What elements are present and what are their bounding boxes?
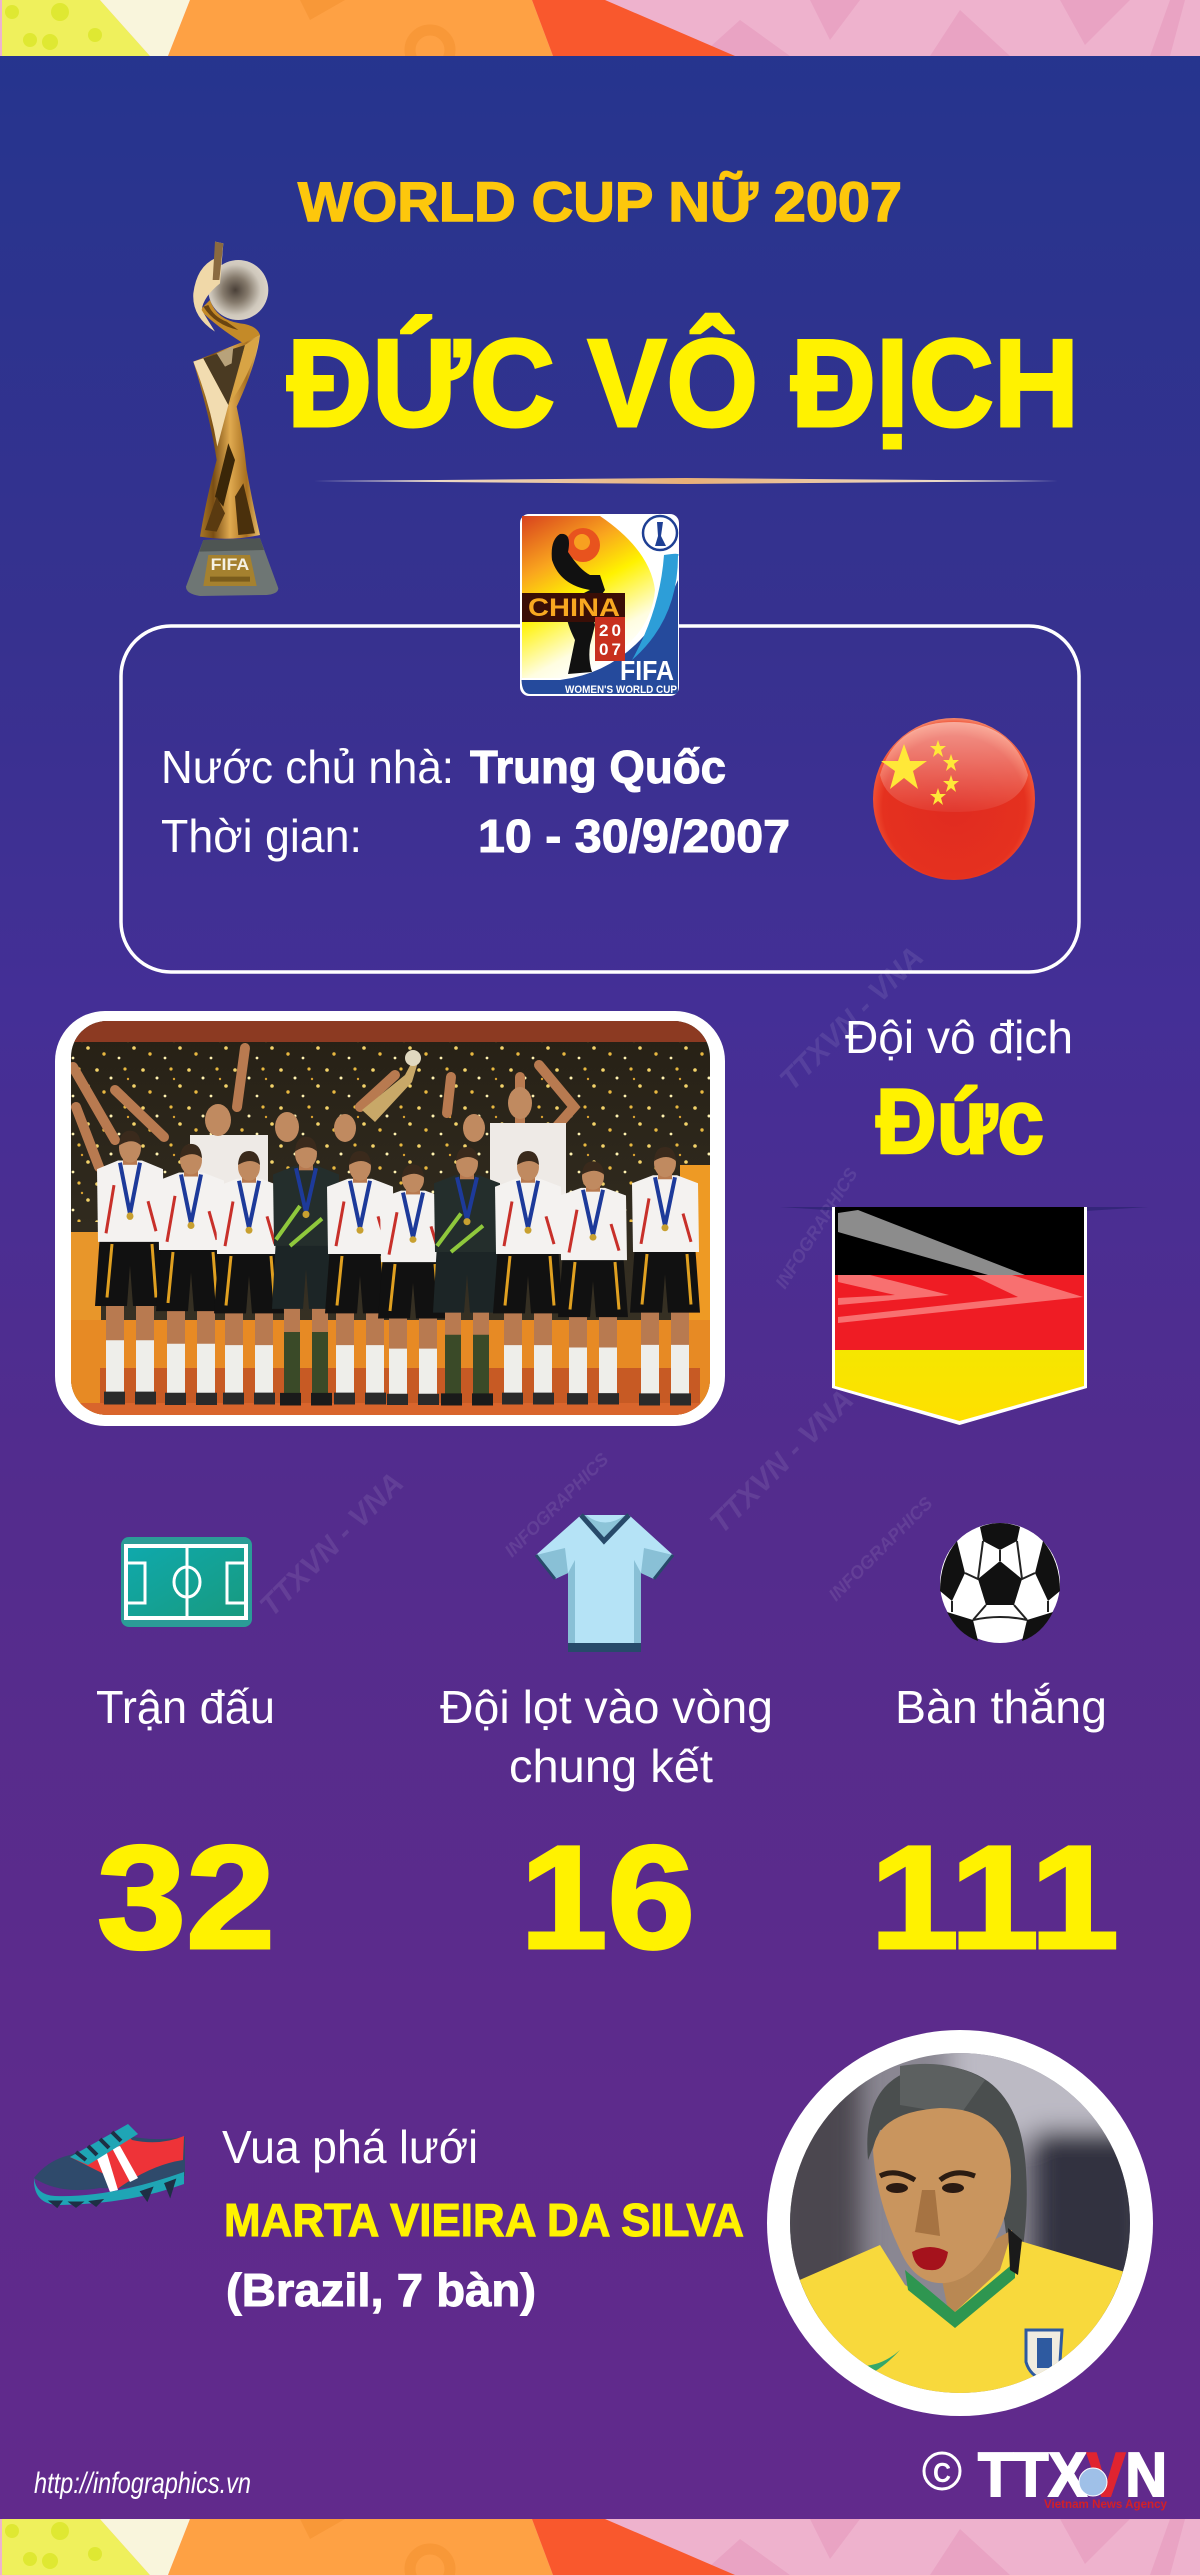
host country text: 10 - 30/9/2007	[478, 810, 790, 862]
tagline: Vietnam News Agency	[1044, 2497, 1167, 2511]
watermarks: INFOGRAPHICS	[771, 1164, 862, 1292]
decorative top band	[0, 0, 1200, 70]
stat: goals	[870, 1523, 1119, 1980]
copyright mark	[924, 2453, 960, 2489]
icon: football boot	[34, 2124, 185, 2206]
top scorer text	[222, 2121, 744, 2316]
logo: China 2007 FIFA Women's World Cup: WOMEN'S WORLD CUP	[565, 684, 677, 696]
decorative bottom band	[0, 2519, 1200, 2575]
host country text: Trung Quốc	[470, 741, 726, 793]
icon: China flag sphere	[873, 718, 1035, 880]
host country text: Nước chủ nhà:	[161, 741, 454, 793]
name: MARTA VIEIRA DA SILVA	[224, 2194, 744, 2246]
host country text	[161, 741, 790, 862]
logo: China 2007 FIFA Women's World Cup: 07	[599, 640, 621, 659]
icon: Women's World Cup trophy	[186, 242, 278, 596]
champion label: Đội vô địch	[845, 1011, 1073, 1063]
icon: football	[940, 1523, 1060, 1643]
logo: China 2007 FIFA Women's World Cup: FIFA	[620, 655, 674, 686]
main title: Đức vô địch: ĐỨC VÔ ĐỊCH	[287, 314, 1079, 453]
label: Vua phá lưới	[222, 2121, 478, 2173]
logo: China 2007 FIFA Women's World Cup	[520, 514, 679, 696]
source URL: http://infographics.vn	[34, 2467, 251, 2500]
champion name: Đức: Đức	[876, 1071, 1044, 1173]
watermarks: INFOGRAPHICS	[825, 1493, 936, 1605]
wordmark: TTXVN	[978, 2441, 1167, 2510]
watermarks: TTXVN - VNA	[254, 1466, 410, 1623]
globe	[1079, 2468, 1107, 2496]
subtitle: World Cup nữ 2007: WORLD CUP NỮ 2007	[298, 170, 902, 233]
stat: teams	[440, 1515, 773, 1980]
icon: jersey	[536, 1515, 673, 1652]
logo: China 2007 FIFA Women's World Cup: 20	[599, 621, 621, 640]
label: chung kết	[509, 1740, 713, 1792]
watermarks: INFOGRAPHICS	[501, 1449, 612, 1561]
stat: matches	[96, 1537, 275, 1980]
portrait: Marta Vieira da Silva	[767, 2030, 1153, 2416]
icon: football pitch	[121, 1537, 252, 1627]
team photo panel	[55, 1011, 725, 1426]
watermarks: TTXVN - VNA	[774, 940, 930, 1097]
icon: Germany flag shield	[780, 1207, 1148, 1425]
label	[440, 1681, 773, 1792]
copyright mark: C	[933, 2457, 951, 2488]
watermarks: TTXVN - VNA	[704, 1383, 860, 1540]
number: 16	[520, 1816, 695, 1980]
title divider	[314, 478, 1058, 484]
number: 111	[870, 1816, 1119, 1980]
label: Đội lọt vào vòng	[440, 1681, 773, 1733]
label: Bàn thắng	[895, 1681, 1107, 1733]
number: 32	[97, 1816, 275, 1980]
watermarks	[254, 940, 936, 1623]
info panel outline	[121, 626, 1079, 972]
host country text: Thời gian:	[161, 810, 362, 862]
icon: Women's World Cup trophy: FIFA	[211, 555, 249, 574]
logo: China 2007 FIFA Women's World Cup: CHINA	[528, 594, 620, 622]
label: Trận đấu	[96, 1681, 275, 1733]
detail: (Brazil, 7 bàn)	[226, 2264, 536, 2316]
logo: TTXVN copyright	[924, 2441, 1167, 2511]
